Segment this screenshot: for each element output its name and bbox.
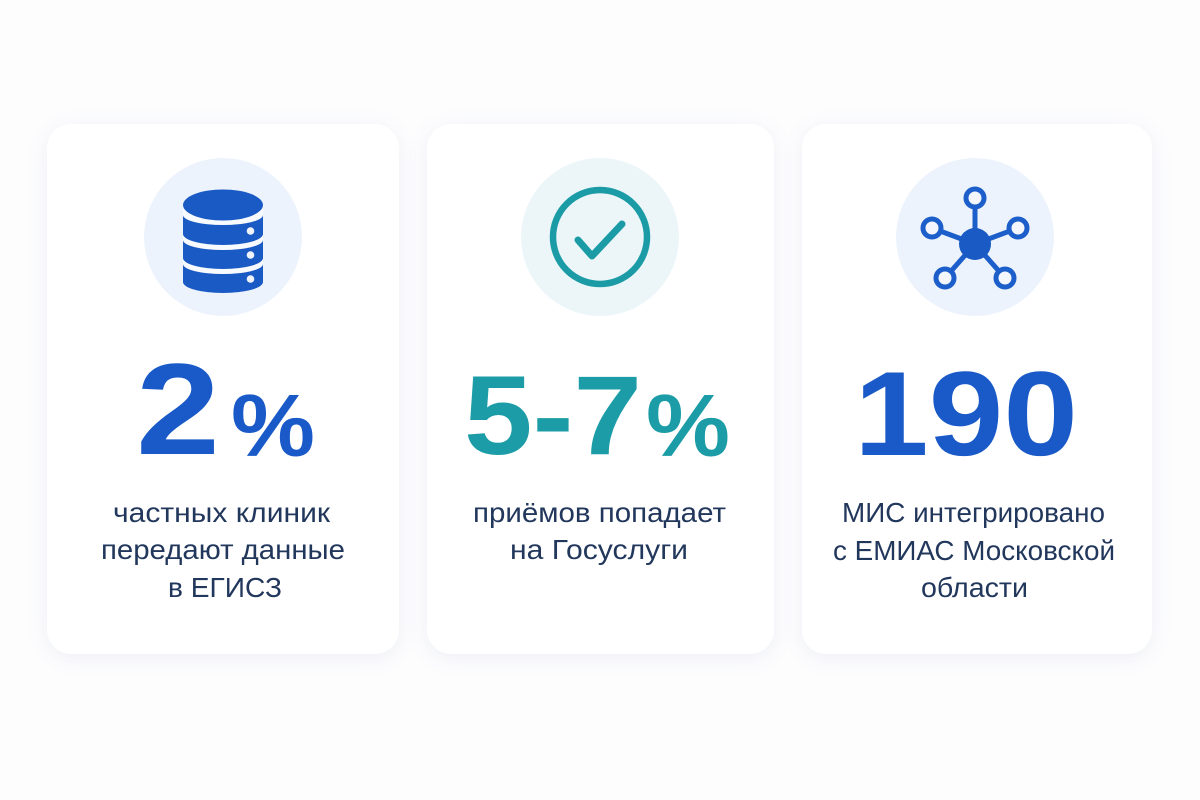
description: в ЕГИСЗ [168, 572, 282, 603]
statistic: 190: 190 [854, 347, 1078, 481]
description: МИС интегрировано [842, 497, 1105, 528]
icon: network [896, 158, 1054, 316]
icon: check mark [521, 158, 679, 316]
description [833, 497, 1115, 603]
description: передают данные [101, 534, 345, 565]
panel: private clinics [47, 124, 399, 654]
description [473, 497, 726, 565]
card background [47, 124, 399, 654]
statistic: 2% [136, 336, 315, 482]
panel: integrated systems [802, 124, 1152, 654]
description: приёмов попадает [473, 497, 726, 528]
card background [802, 124, 1152, 654]
description: на Госуслуги [510, 534, 688, 565]
card background [427, 124, 774, 654]
statistic: 5-7%: 5-7 [464, 353, 642, 478]
statistic: 2%: 2 [136, 336, 220, 482]
icon: database [144, 158, 302, 316]
statistic: 5-7%: % [646, 376, 730, 475]
description [101, 497, 345, 603]
description: области [921, 572, 1028, 603]
panel: appointments [427, 124, 774, 654]
statistic: 2%: % [231, 376, 315, 475]
description: с ЕМИАС Московской [833, 535, 1115, 566]
description: частных клиник [113, 497, 331, 528]
statistic: 5-7% [464, 353, 730, 478]
